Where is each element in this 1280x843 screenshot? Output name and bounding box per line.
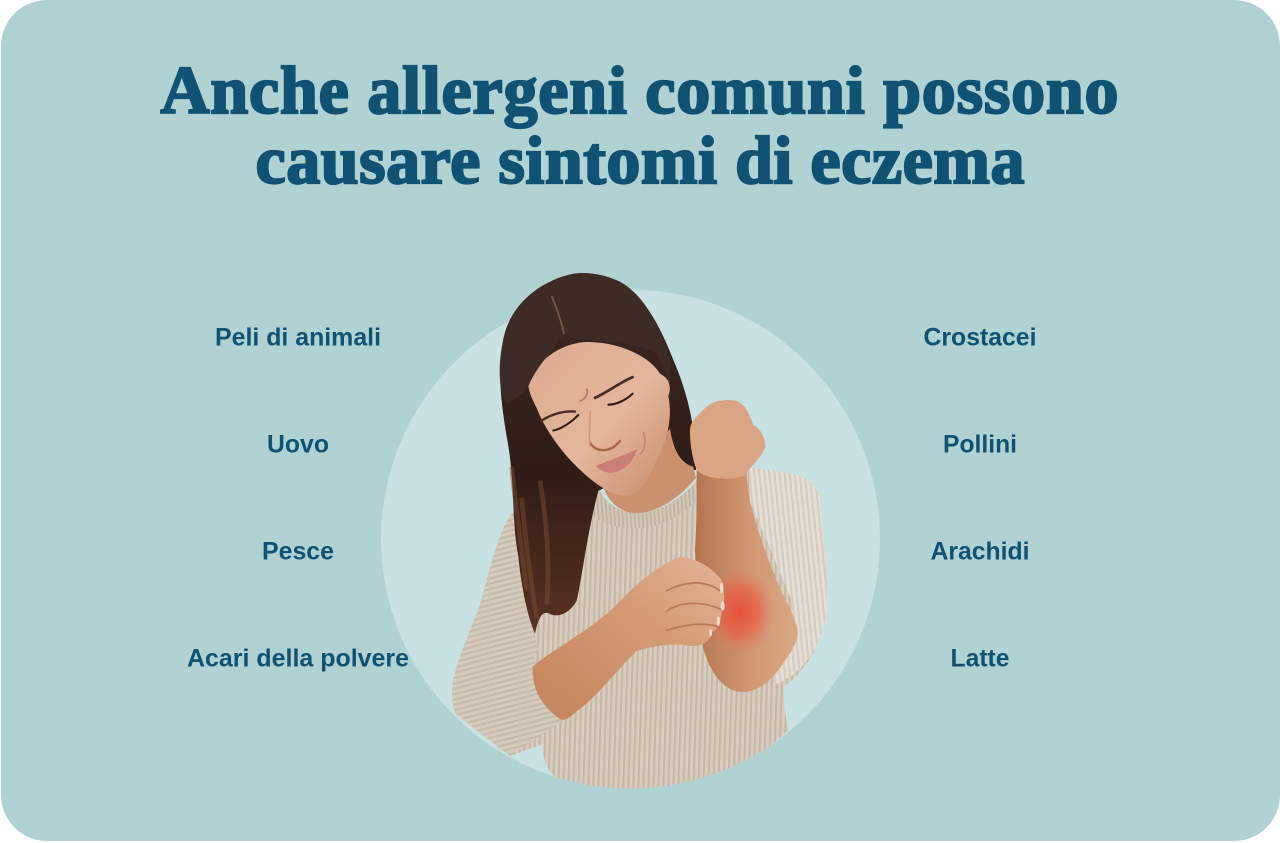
neck collar [593,480,697,528]
mouth [596,449,637,473]
face [528,342,670,496]
hair highlights [512,467,548,618]
lower forearm and scratching hand [533,557,724,720]
light circle behind the woman [381,290,880,788]
right allergens list: Arachidi [930,538,1030,566]
face features [542,377,645,455]
red rash [705,568,775,654]
left sleeve ribbing [452,514,564,756]
right allergens list: Crostacei [924,324,1036,352]
right sleeve [748,467,827,685]
left allergens list: Acari della polvere [187,644,409,672]
back hair [500,273,696,634]
right allergens list: Pollini [943,430,1017,458]
front hair [500,273,670,405]
left allergens list: Pesce [262,538,334,566]
hair parting [552,296,564,334]
right allergens list [924,324,1036,672]
title: causare sintomi di eczema [256,122,1024,198]
finger lines [667,583,722,630]
left allergens list: Peli di animali [215,324,381,352]
fingernails [709,582,725,637]
neck [603,429,696,513]
woman scratching her arm [452,273,827,795]
right allergens list: Latte [950,644,1010,672]
left allergens list: Uovo [267,430,329,458]
title [160,52,1118,198]
raised fist [690,400,765,479]
left allergens list [187,324,409,672]
sweater [452,467,827,795]
title: Anche allergeni comuni possono [160,52,1118,128]
raised forearm [695,470,798,692]
